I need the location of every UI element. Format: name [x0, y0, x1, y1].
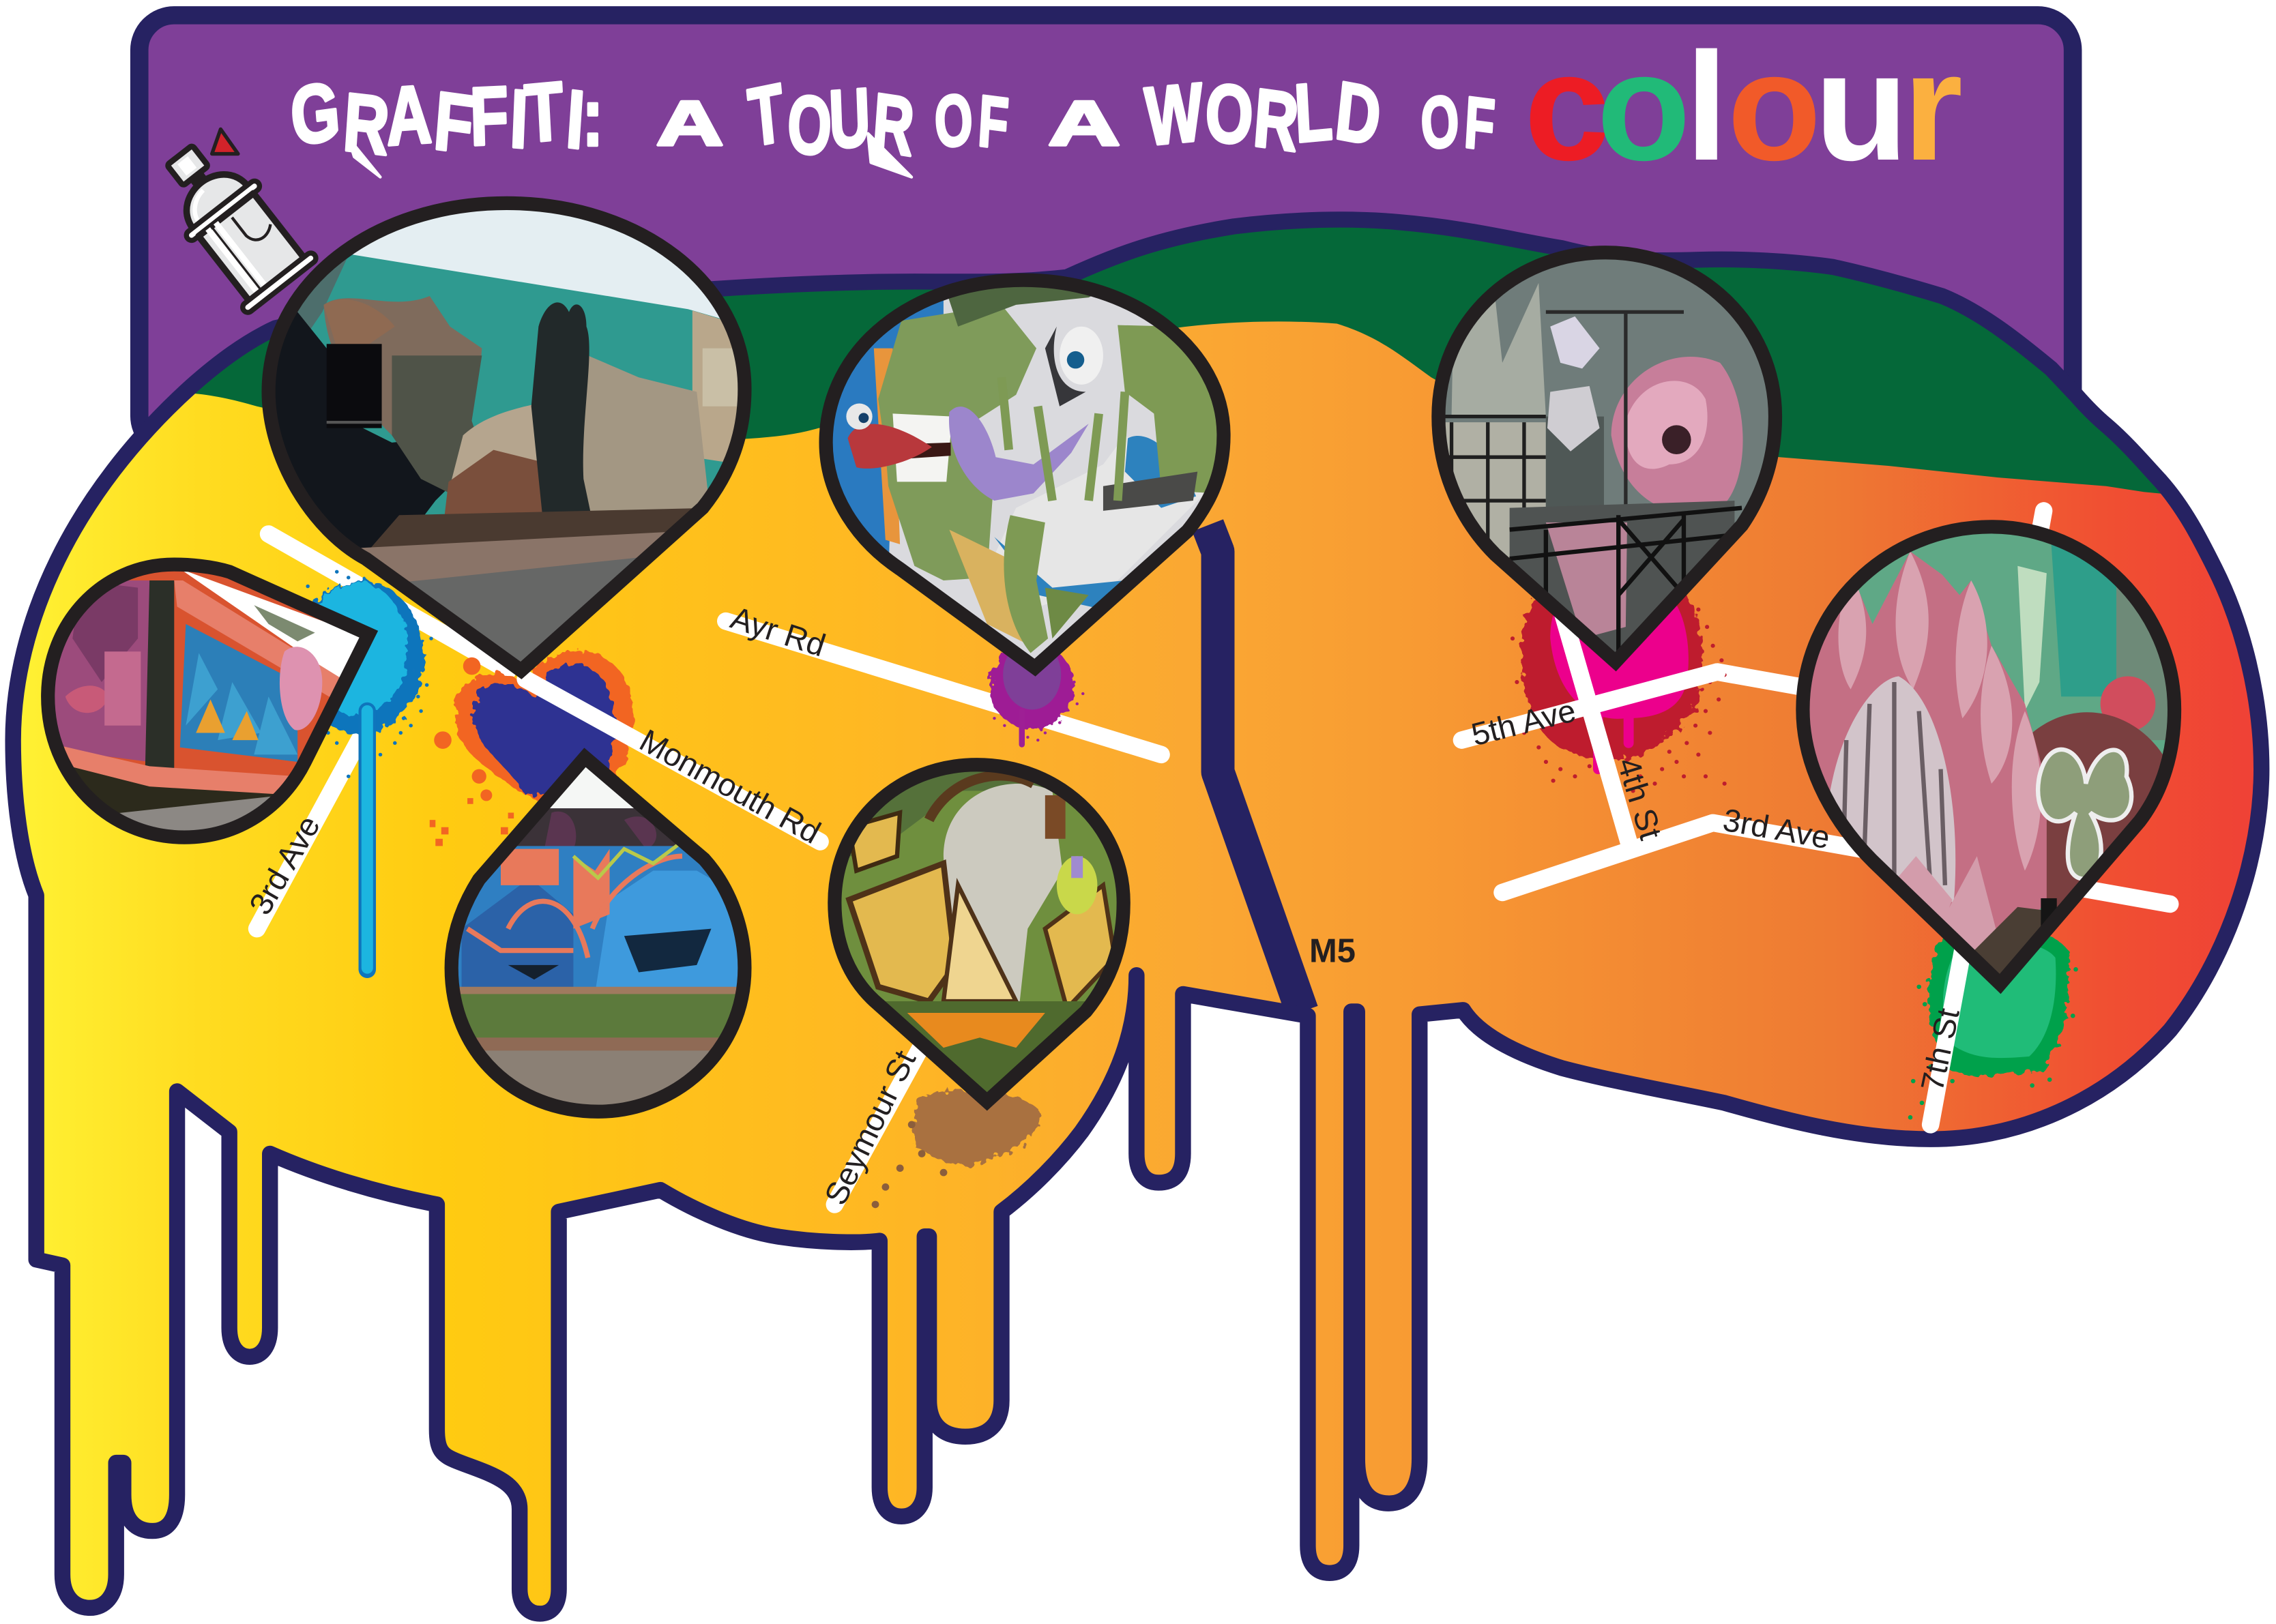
road: 3rd Ave east — [1502, 823, 2170, 904]
pin photo — [1809, 533, 2168, 974]
pin outline — [834, 765, 1124, 1102]
splat body — [914, 1090, 1040, 1166]
road label: 3rd Ave east: 3rd Ave — [1721, 802, 1833, 855]
pin outline — [48, 565, 368, 838]
splat specks — [1513, 610, 1725, 791]
title text: graffiti words: WORLD — [1143, 64, 1385, 169]
splat specks — [875, 1125, 944, 1205]
photo pin: yellow tag with flowers — [828, 754, 1132, 1110]
title text: colour: o — [1727, 20, 1822, 192]
title text: graffiti words: OF — [933, 78, 1010, 165]
spray splat: dark blue and orange — [430, 651, 633, 846]
pin outline — [269, 203, 744, 670]
splat core — [473, 664, 615, 795]
road: Ayr Rd — [726, 621, 1161, 754]
title text: colour: c — [1524, 20, 1609, 192]
road label: Monmouth Rd: Monmouth Rd — [634, 722, 826, 851]
pin photo — [276, 210, 738, 662]
photo pin: protea flower — [1793, 515, 2185, 1001]
spray splat: brown — [875, 1090, 1040, 1205]
photo pin: woman mural — [247, 189, 770, 682]
title text: graffiti words: A — [1048, 89, 1120, 159]
road label: 4th St: 4th St — [1611, 754, 1669, 844]
M5 motorway line — [1208, 525, 1302, 1012]
splat core — [1550, 595, 1689, 719]
spray splat: green — [1910, 928, 2076, 1117]
title text: colour: r — [1903, 20, 1963, 192]
road: 5th Ave — [1461, 672, 1717, 740]
road: 7th St — [1931, 511, 2044, 1125]
splat halo — [296, 580, 424, 735]
roads over paint — [1461, 511, 2044, 1125]
road: 5th Ave east — [1717, 672, 1873, 700]
spray splat: purple — [990, 640, 1083, 744]
photo pin: grey wall with peony — [1430, 247, 1785, 675]
title text: graffiti words: GRAFFITI: — [287, 64, 603, 173]
paint drips — [1598, 711, 1629, 769]
road: Seymour St — [834, 979, 958, 1205]
paint drip — [1021, 711, 1023, 744]
road label: 3rd Ave west: 3rd Ave — [242, 810, 327, 921]
icon: spray can — [144, 128, 318, 314]
road: 3rd Ave west — [257, 653, 407, 929]
splat halo — [456, 651, 633, 803]
drip edge — [363, 711, 371, 969]
splat core — [1003, 640, 1061, 709]
splat specks — [1910, 969, 2076, 1117]
green hills band — [195, 228, 2161, 494]
road: Monmouth Rd east — [525, 679, 820, 842]
splat halo — [1927, 928, 2069, 1076]
road label: M5: M5 — [1309, 933, 1356, 970]
title — [287, 20, 1963, 192]
photo pin: green monster — [813, 269, 1234, 682]
splat specks — [430, 658, 514, 846]
splat specks — [994, 682, 1083, 740]
splat core — [1943, 941, 2056, 1058]
road label: 7th St: 7th St — [1914, 1005, 1966, 1094]
pin outline — [1803, 527, 2174, 984]
title text: graffiti words: A — [656, 88, 724, 159]
brush tails — [349, 134, 911, 177]
pin photo — [55, 572, 360, 831]
splat halo — [1521, 580, 1702, 761]
splat halo — [990, 643, 1074, 730]
road: Monmouth Rd west — [269, 534, 508, 670]
pin photo — [458, 767, 738, 1105]
pin outline — [1438, 252, 1775, 662]
spray splat: red and pink — [1513, 580, 1725, 791]
pin photo — [1445, 259, 1768, 652]
title text: colour: u — [1814, 20, 1908, 192]
road label: Ayr Rd: Ayr Rd — [727, 600, 830, 664]
icon: red paint triangle — [212, 129, 238, 154]
paint drip — [364, 711, 370, 968]
splat specks — [297, 572, 431, 776]
spray splat: blue — [296, 572, 431, 969]
title text: colour: o — [1596, 20, 1691, 192]
pin outline — [452, 758, 744, 1112]
road: 4th St — [1553, 580, 1629, 842]
pin photo — [841, 771, 1117, 1093]
photo pin: blue graffiti wall — [435, 740, 755, 1132]
title text: graffiti words: OF — [1418, 80, 1497, 166]
pin outline — [826, 280, 1224, 668]
road label: Seymour St: Seymour St — [817, 1045, 922, 1211]
roads under paint — [257, 534, 2170, 1205]
title text: colour: l — [1685, 20, 1728, 192]
road label: 5th Ave: 5th Ave — [1468, 692, 1579, 752]
title banner — [139, 15, 2073, 451]
pin photo — [832, 286, 1217, 659]
photo pin: pink mural wall — [36, 551, 385, 856]
splat core — [306, 582, 408, 715]
title text: graffiti words — [287, 64, 1497, 177]
title text: graffiti words: TOUR — [745, 65, 917, 173]
